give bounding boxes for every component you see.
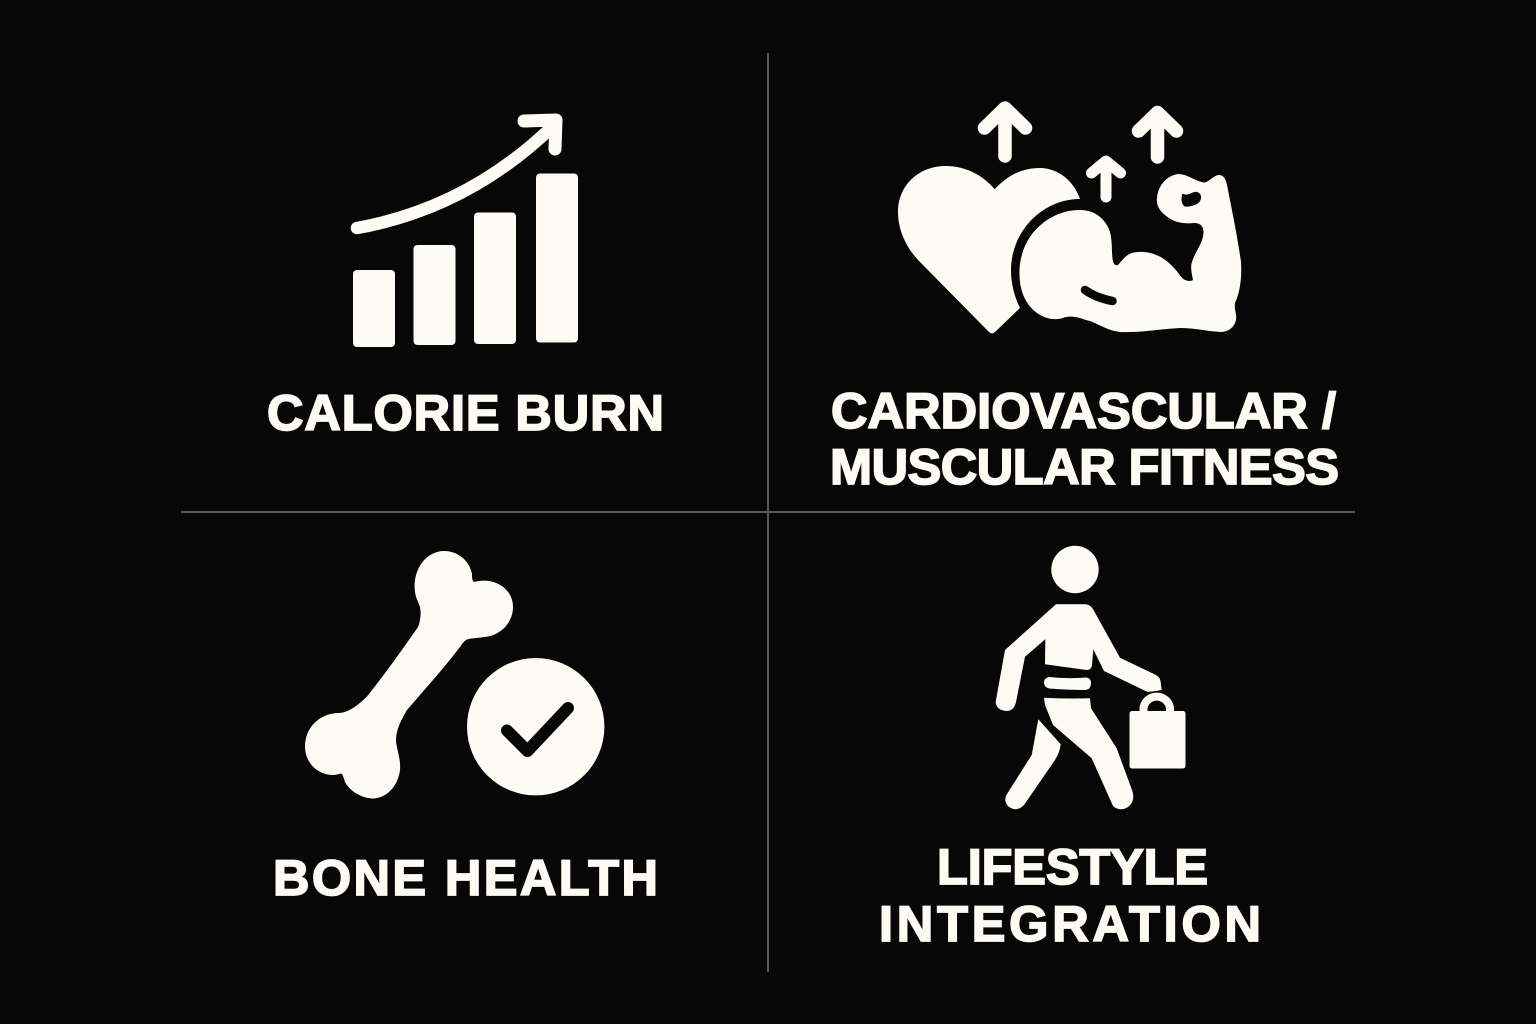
heading: lifestyle integration: LIFESTYLE (937, 838, 1208, 895)
icon: walking person with shopping bag (996, 546, 1186, 809)
heading: cardiovascular / muscular fitness: CARDIOVASCULAR / (831, 382, 1336, 439)
panel: lifestyle integration (879, 546, 1261, 952)
heading: calorie burn: CALORIE BURN (267, 384, 664, 441)
icon: up arrow right (1138, 112, 1176, 157)
heading: lifestyle integration: INTEGRATION (879, 895, 1261, 952)
panel: bone health (273, 551, 658, 906)
icon: bone (305, 551, 513, 798)
heading: cardiovascular / muscular fitness (830, 382, 1339, 495)
icon: up arrow middle (1092, 161, 1120, 197)
icon: bone with check badge (305, 551, 604, 798)
panel: cardiovascular and muscular fitness (830, 108, 1339, 495)
icon: up arrow left (984, 108, 1026, 156)
icon: rising bar chart with arrow (353, 120, 578, 347)
heading: cardiovascular / muscular fitness: MUSCULAR FITNESS (830, 438, 1339, 495)
heading: lifestyle integration (879, 838, 1261, 952)
icon: check badge (467, 658, 604, 795)
icon: heart, flexed arm and up arrows (898, 108, 1241, 334)
icon: shopping bag (1130, 697, 1186, 768)
icon: flexed arm (1019, 174, 1241, 332)
panel: calorie burn (267, 120, 664, 441)
icon: heart (898, 166, 1080, 334)
heading: bone health: BONE HEALTH (273, 849, 658, 906)
